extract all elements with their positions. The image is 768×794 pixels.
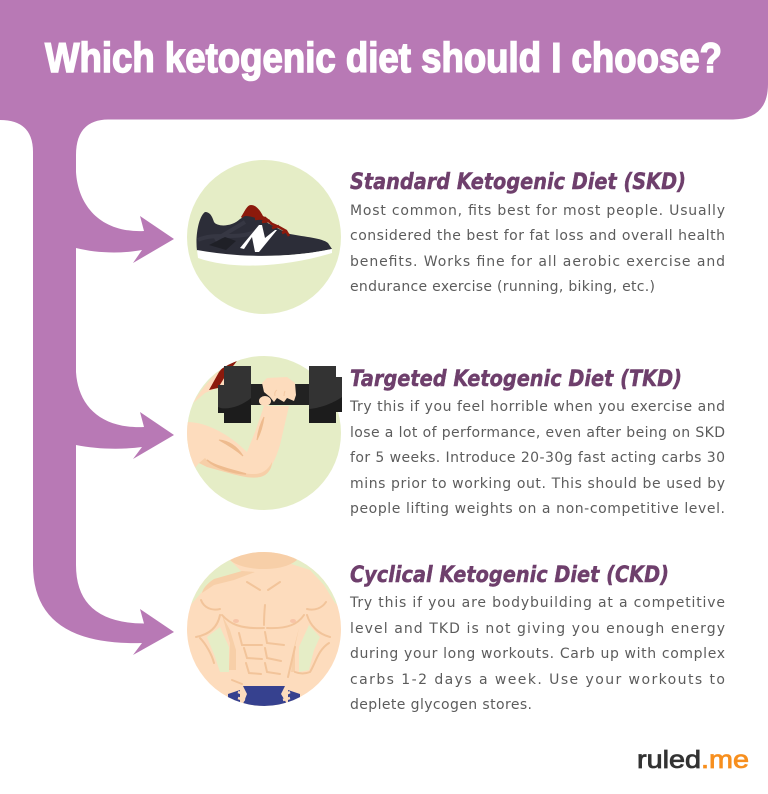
body text: lose a lot of performance, even after being on SKD bbox=[350, 425, 725, 441]
body text bbox=[349, 399, 725, 517]
heading: Targeted Ketogenic Diet (TKD) bbox=[350, 367, 682, 392]
hand bbox=[259, 377, 296, 406]
heading: Standard Ketogenic Diet (SKD) bbox=[350, 170, 686, 195]
body text: during your long workouts. Carb up with complex bbox=[350, 646, 725, 662]
body text: Try this if you feel horrible when you exercise and bbox=[349, 399, 725, 415]
body text bbox=[350, 203, 725, 295]
logo: ruled .me bbox=[637, 746, 749, 774]
heading: Cyclical Ketogenic Diet (CKD) bbox=[350, 563, 669, 588]
section: Cyclical Ketogenic Diet bbox=[349, 563, 725, 713]
body text: carbs 1-2 days a week. Use your workouts to bbox=[350, 672, 725, 688]
body text: mins prior to working out. This should be used by bbox=[350, 476, 725, 492]
dumbbell bbox=[218, 366, 342, 423]
body text: endurance exercise (running, biking, etc.) bbox=[350, 279, 655, 295]
body text: people lifting weights on a non-competitive level. bbox=[350, 501, 725, 517]
body text bbox=[349, 595, 725, 713]
body text: deplete glycogen stores. bbox=[350, 697, 532, 713]
icon: muscular torso bbox=[186, 550, 345, 706]
body text: benefits. Works fine for all aerobic exercise and bbox=[350, 254, 725, 270]
body text: level and TKD is not giving you enough energy bbox=[350, 621, 725, 637]
body text: for 5 weeks. Introduce 20-30g fast acting carbs 30 bbox=[350, 450, 725, 466]
arrow 1 bbox=[70, 160, 174, 263]
body text: Try this if you are bodybuilding at a competitive bbox=[349, 595, 725, 611]
section: Standard Ketogenic Diet bbox=[350, 170, 725, 295]
icon: arm with dumbbell bbox=[180, 356, 342, 510]
arrow 2 bbox=[70, 366, 174, 459]
body text: Most common, fits best for most people. Usually bbox=[350, 203, 725, 219]
section: Targeted Ketogenic Diet bbox=[349, 367, 725, 517]
icon: running shoe bbox=[187, 160, 341, 314]
body text: considered the best for fat loss and overall health bbox=[350, 228, 725, 244]
